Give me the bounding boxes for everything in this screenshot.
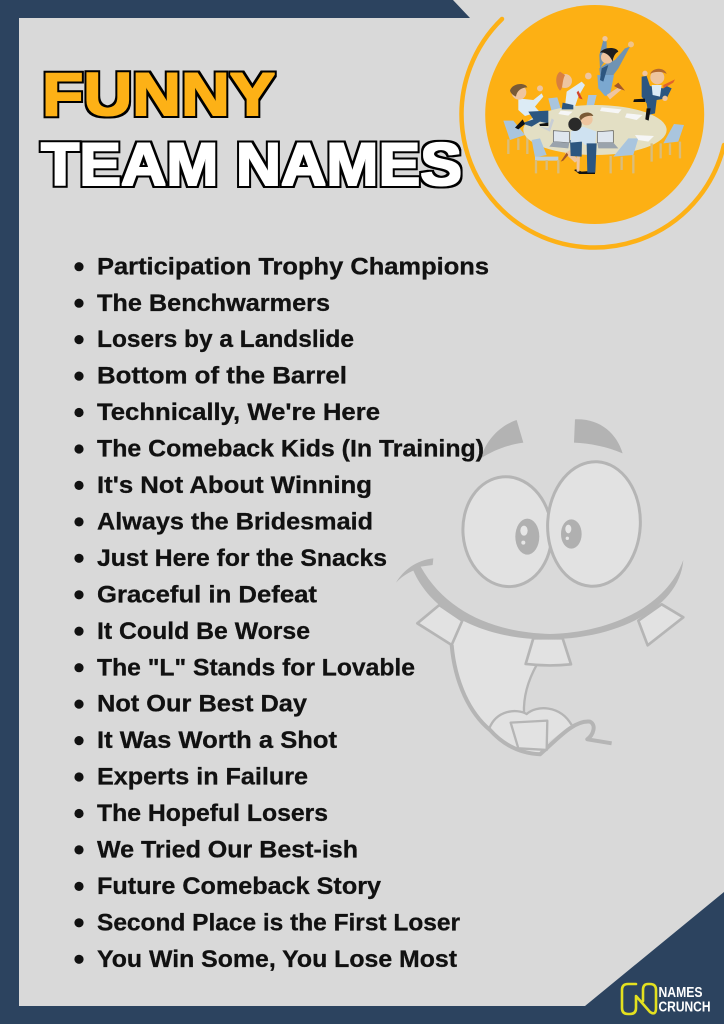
list item 17: We Tried Our Best-ish bbox=[97, 836, 358, 864]
list item 14: It Was Worth a Shot bbox=[97, 727, 337, 754]
list item 15: Experts in Failure bbox=[97, 764, 308, 791]
illustration: team celebrating around a table bbox=[503, 36, 684, 174]
orange circle bbox=[485, 5, 704, 224]
person left bbox=[518, 93, 543, 116]
list item 11: It Could Be Worse bbox=[97, 618, 310, 645]
list item 10: Graceful in Defeat bbox=[97, 581, 317, 608]
logo: Names Crunch bbox=[622, 984, 710, 1016]
list item 4: Bottom of the Barrel bbox=[97, 363, 347, 390]
list item 3: Losers by a Landslide bbox=[97, 326, 354, 353]
title bbox=[41, 61, 462, 198]
list item 6: The Comeback Kids (In Training) bbox=[97, 436, 484, 463]
list item 7: It's Not About Winning bbox=[97, 472, 372, 499]
list item 16: The Hopeful Losers bbox=[97, 800, 328, 827]
title line: Team Names: TEAM NAMES bbox=[41, 131, 462, 198]
list item 8: Always the Bridesmaid bbox=[97, 508, 373, 536]
list item 9: Just Here for the Snacks bbox=[97, 545, 387, 572]
title line: Funny: FUNNY bbox=[42, 61, 275, 128]
person rear red hair bbox=[565, 82, 585, 107]
illustration: smiling face watermark bbox=[396, 419, 683, 754]
list item 19: Second Place is the First Loser bbox=[97, 909, 460, 936]
logo text: Names: NAMES bbox=[658, 985, 703, 1001]
list item 12: The "L" Stands for Lovable bbox=[97, 654, 415, 681]
decorative ring arc bbox=[462, 19, 724, 248]
list item 20: You Win Some, You Lose Most bbox=[97, 946, 457, 973]
person right bbox=[642, 76, 672, 115]
hugging pair bbox=[565, 150, 578, 163]
list item 5: Technically, We're Here bbox=[97, 399, 380, 426]
list item 13: Not Our Best Day bbox=[97, 691, 308, 718]
person jumping bbox=[599, 47, 630, 75]
team names list bbox=[74, 253, 489, 973]
list item 2: The Benchwarmers bbox=[97, 290, 330, 317]
logo text: Crunch: CRUNCH bbox=[658, 1000, 710, 1016]
list item 18: Future Comeback Story bbox=[97, 873, 382, 900]
icon: N mark bbox=[622, 984, 656, 1014]
list item 1: Participation Trophy Champions bbox=[97, 253, 489, 280]
